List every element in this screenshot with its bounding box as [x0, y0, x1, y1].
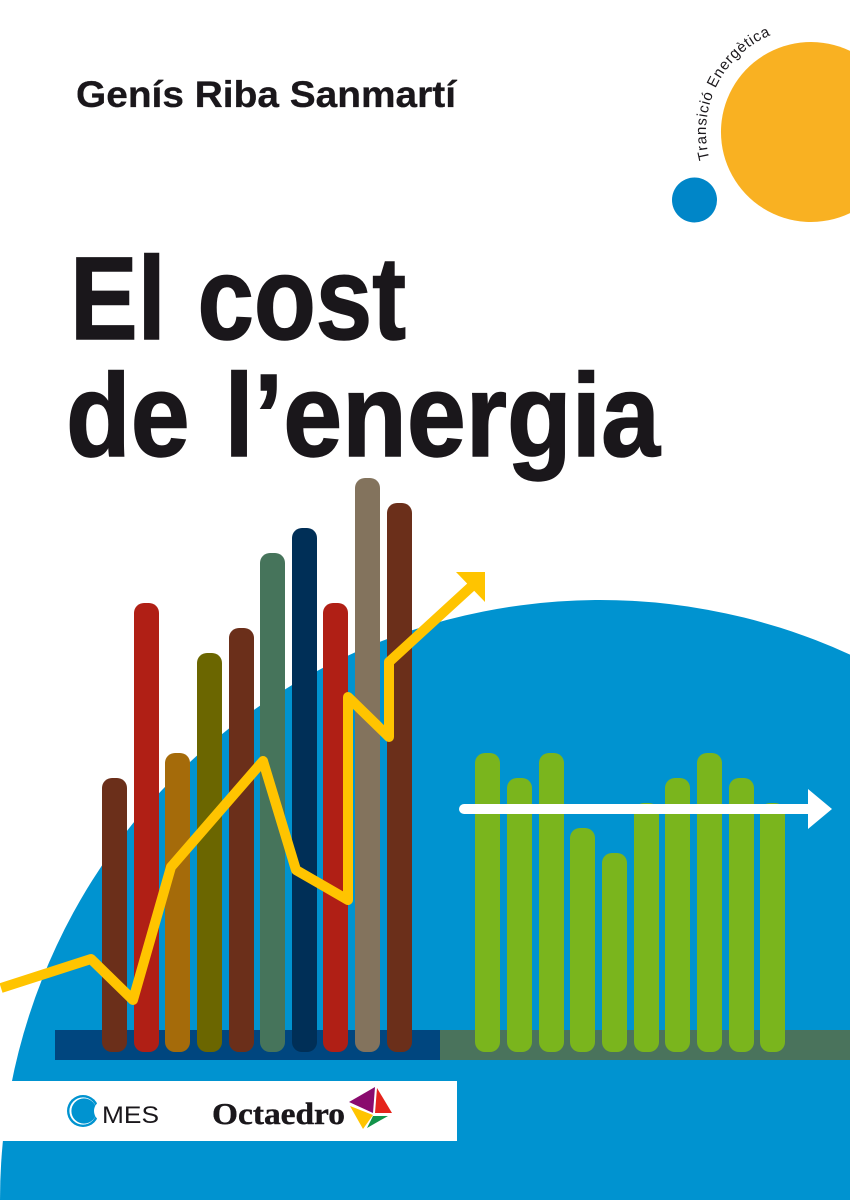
green stable bar chart: [475, 753, 785, 1052]
rising multicolour bar chart: [102, 478, 412, 1052]
logo: CMES: MES: [102, 1102, 159, 1129]
icon: orange circle: [721, 42, 850, 222]
title line 2: de l’energia: [66, 350, 661, 482]
icon: small blue circle: [672, 178, 717, 222]
chart ground bands: [55, 1030, 850, 1060]
title line 1: El cost: [70, 233, 406, 365]
large blue circle background: [0, 600, 850, 1200]
ground: dark blue: [55, 1030, 440, 1060]
author name: Genís Riba Sanmartí: [76, 74, 458, 115]
arrow: yellow rising price line: [1, 572, 485, 1000]
ground: green-grey: [440, 1030, 850, 1060]
title: [66, 233, 661, 482]
logo: CMES: [67, 1095, 159, 1129]
series name on arc: Transició Energètica: [696, 29, 770, 161]
series logo: Transició Energètica: [672, 29, 850, 222]
logo: Octaedro: Octaedro: [212, 1096, 345, 1131]
publisher logo band: [0, 1081, 457, 1141]
arrow: white flat line: [464, 789, 832, 829]
logo: Octaedro: [212, 1087, 392, 1131]
